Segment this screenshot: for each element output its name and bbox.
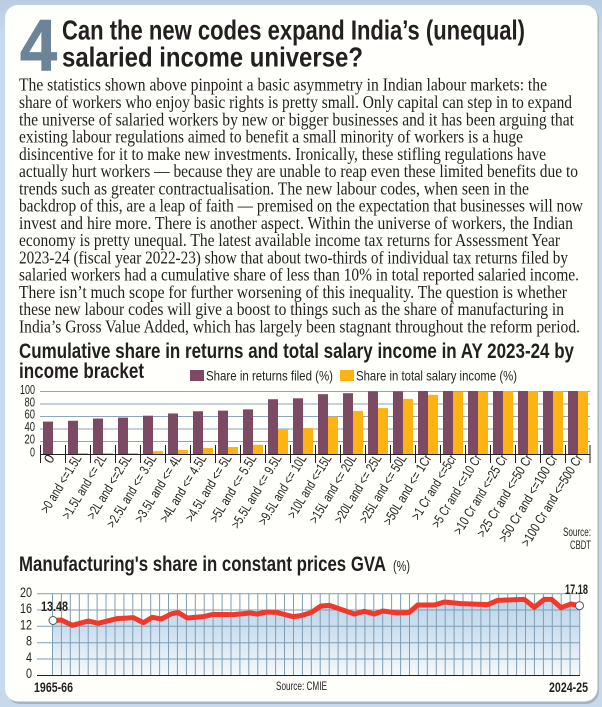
y axis labels: 100	[20, 383, 35, 397]
y axis labels: 0	[30, 446, 35, 460]
legend: Share in returns filed (%)	[206, 368, 333, 384]
x axis labels: >10 Cr and <=25 Cr	[450, 451, 511, 537]
title	[62, 14, 525, 72]
y axis labels: 4	[26, 649, 32, 665]
heading: line chart: Manufacturing's share in constant prices GVA	[19, 553, 386, 576]
x axis labels: >4L and <= 4.5L	[157, 451, 210, 525]
area under line	[52, 599, 579, 675]
title: salaried income universe?	[62, 42, 363, 72]
x axis end label: 2024-25	[549, 679, 588, 695]
x axis labels: >3.5L and <= 4L	[132, 451, 185, 525]
source: CBDT	[563, 525, 591, 552]
x axis labels: >5.5L and <= 9.5L	[228, 451, 285, 531]
x axis labels: >50L and <= 1Cr	[380, 451, 435, 528]
x axis start label: 1965-66	[34, 679, 73, 695]
x axis labels: >2L and <=2.5L	[84, 451, 135, 522]
body text: The statistics shown above pinpoint a basic asymmetry in Indian labour markets: the	[19, 75, 547, 95]
body text	[19, 75, 583, 336]
source: CBDT: CBDT	[570, 538, 591, 552]
bars: share in total salary income	[78, 391, 588, 454]
x axis labels: >100 Cr and <=500 Cr	[518, 451, 586, 549]
y axis labels: 12	[20, 616, 32, 632]
x axis labels: 0	[41, 452, 58, 466]
end marker	[576, 602, 584, 610]
y axis labels: 20	[24, 433, 35, 447]
y axis labels: 16	[20, 600, 32, 616]
x axis labels: >10L and <=15L	[284, 451, 335, 521]
x axis labels: >20L and <= 25L	[331, 451, 385, 526]
heading: bar chart	[19, 340, 574, 383]
y axis labels	[20, 383, 35, 460]
x axis labels: >9.5L and <= 10L	[255, 451, 310, 528]
bar chart	[20, 383, 590, 549]
body text: disincentive for it to make new investments. Ironically, these stifling regulations have	[19, 144, 546, 164]
heading: line chart: (%)	[393, 558, 410, 575]
y axis labels: 0	[26, 665, 32, 681]
start marker	[49, 616, 57, 624]
x axis labels: >25L and <= 50L	[356, 451, 410, 526]
y axis labels: 80	[24, 395, 35, 409]
x axis labels: >50 Cr and <=100 Cr	[496, 451, 561, 545]
x axis labels: >0 and <=1.5L	[37, 451, 85, 516]
y axis labels	[20, 584, 32, 681]
source: CMIE: Source: CMIE	[276, 679, 327, 693]
x axis labels: >4.5L and <= 5L	[182, 451, 235, 524]
x axis labels	[37, 451, 586, 549]
x axis labels: >25 Cr and <=50 Cr	[474, 451, 536, 540]
x axis labels: >5L and <= 5.5L	[207, 451, 260, 525]
y axis labels: 8	[26, 633, 32, 649]
y axis labels: 40	[24, 420, 35, 434]
value label 13.48: 13.48	[41, 599, 68, 614]
x axis labels: >2.5L and <= 3.5L	[103, 451, 160, 530]
bars: share in returns filed	[43, 391, 578, 454]
legend: Share in total salary income (%)	[356, 368, 517, 384]
value label 17.18: 17.18	[565, 582, 588, 597]
heading: bar chart: income bracket	[19, 360, 144, 383]
body text: trends such as greater contractualisation. The new labour codes, when seen in the	[19, 178, 529, 198]
y axis labels: 20	[20, 584, 32, 600]
section number 4: 4	[20, 6, 57, 86]
y axis labels: 60	[24, 408, 35, 422]
x axis labels: >15L and <= 20L	[306, 451, 360, 526]
body text: existing labour regulations aimed to benefit a small minority of workers is a huge	[19, 126, 523, 146]
x axis labels: >1 Cr and <=5cr	[408, 451, 460, 523]
line chart	[20, 582, 588, 695]
data line	[52, 599, 579, 625]
legend	[190, 368, 517, 384]
x axis labels: >5 Cr and <=10 Cr	[428, 451, 485, 530]
x axis labels: >1.5L and <= 2L	[59, 451, 110, 522]
